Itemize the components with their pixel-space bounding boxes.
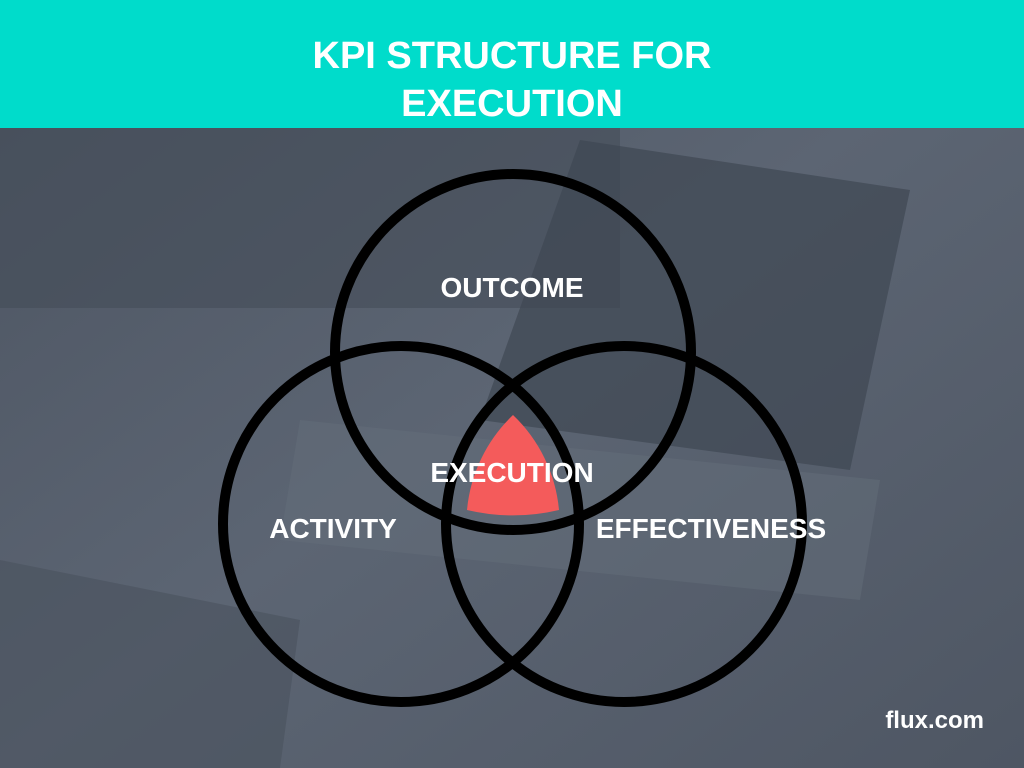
title: EXECUTION [401, 83, 623, 125]
labels: OUTCOME [440, 272, 584, 303]
labels [269, 272, 826, 544]
labels: EFFECTIVENESS [596, 513, 826, 544]
header [0, 0, 1024, 128]
title: KPI STRUCTURE FOR [312, 35, 712, 77]
execution intersection [467, 415, 559, 515]
brand: flux.com [885, 707, 984, 734]
labels: ACTIVITY [269, 513, 397, 544]
circles [223, 174, 802, 702]
title [312, 35, 712, 125]
labels: EXECUTION [430, 457, 594, 488]
